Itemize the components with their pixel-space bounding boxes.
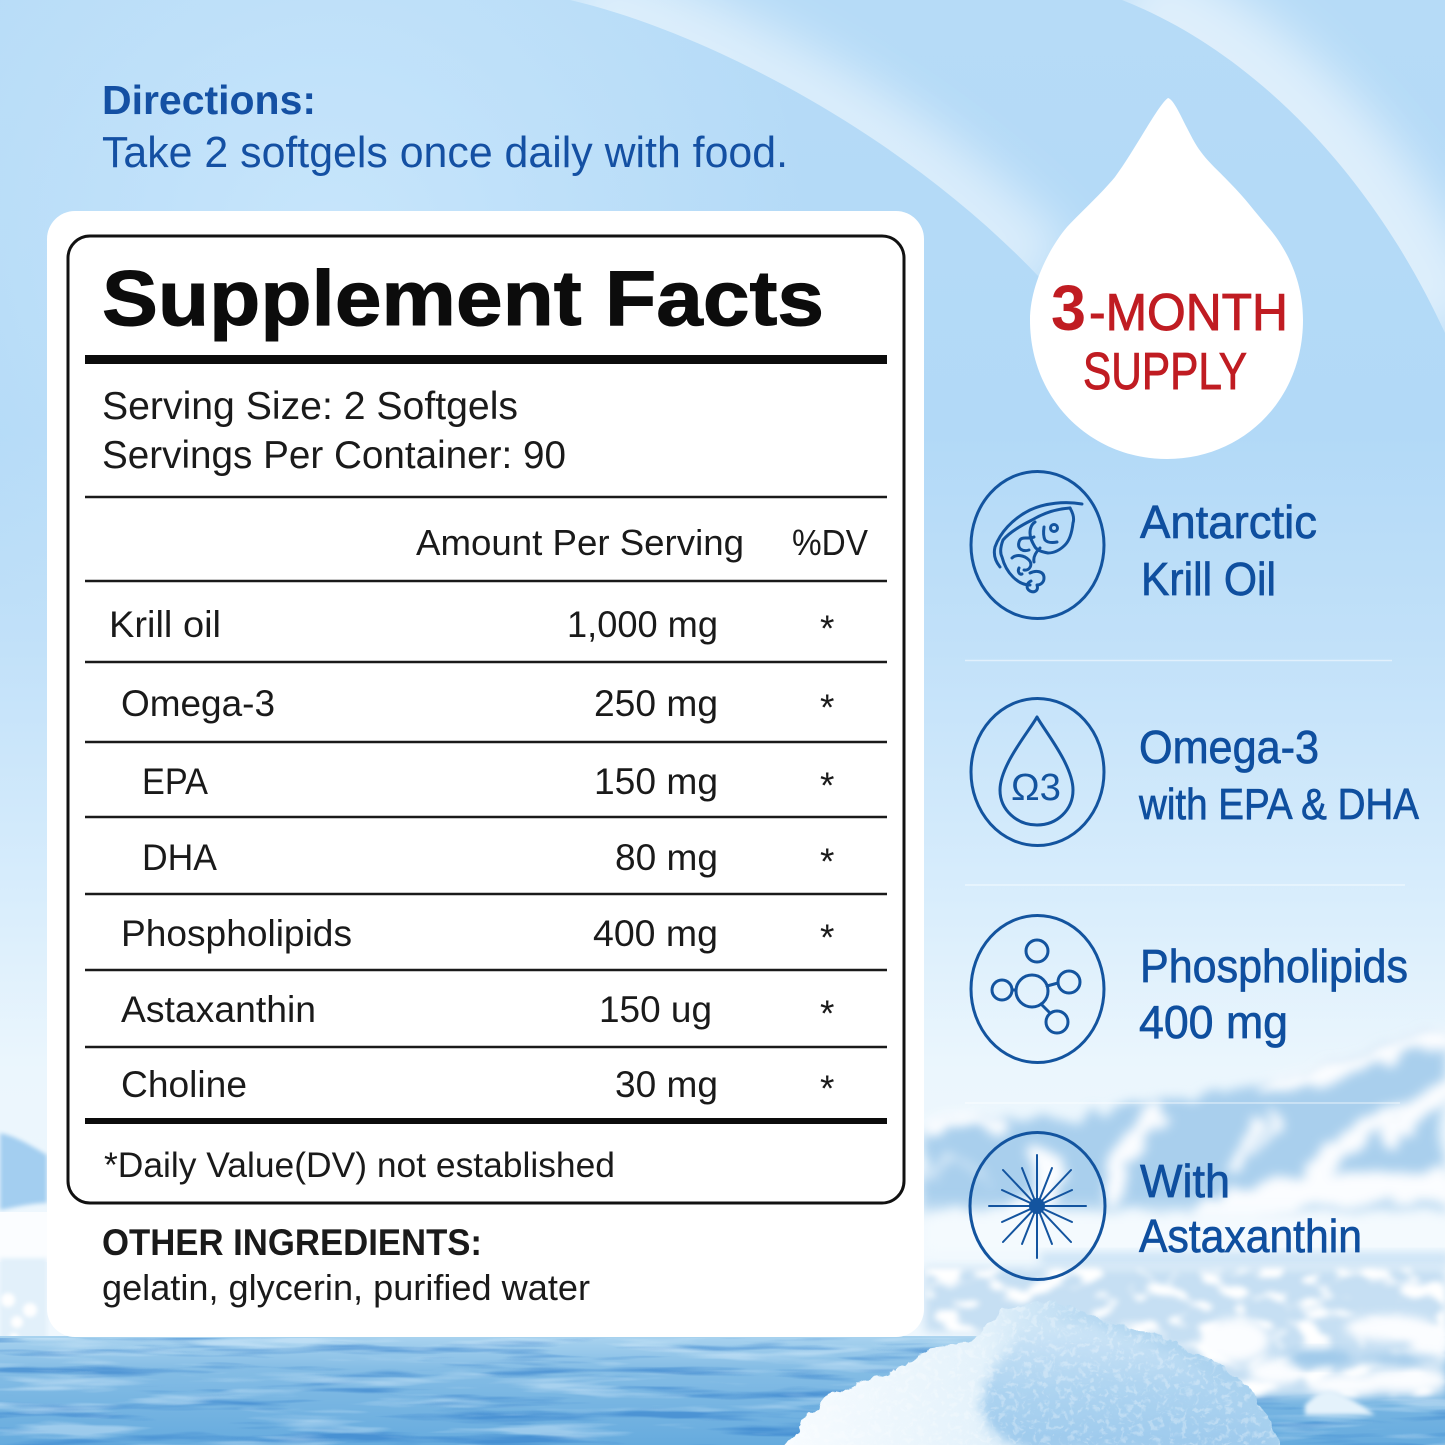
other ingredients — [102, 1222, 590, 1308]
feature: phospholipids: 400 mg — [1139, 996, 1288, 1048]
row: astaxanthin: * — [820, 993, 834, 1034]
row: choline — [121, 1064, 834, 1109]
row: omega-3: * — [820, 687, 834, 728]
row: dha: 80 mg — [615, 837, 718, 878]
feature: with astaxanthin: Astaxanthin — [1139, 1210, 1362, 1262]
badge: 3-month supply drop: 3 — [1051, 272, 1086, 344]
title: supplement facts: Supplement Facts — [102, 254, 824, 342]
row: omega-3: 250 mg — [594, 683, 718, 724]
row: astaxanthin: Astaxanthin — [121, 989, 316, 1030]
badge: 3-month supply drop: -MONTH — [1089, 284, 1288, 342]
row: krill oil: * — [820, 608, 834, 649]
icon: omega-3 drop: Ω3 — [1011, 767, 1061, 809]
feature: phospholipids: Phospholipids — [1140, 940, 1408, 992]
row: omega-3 — [85, 683, 887, 742]
row: krill oil: Krill oil — [109, 604, 221, 645]
panel: supplement facts card — [47, 211, 924, 1337]
heading: directions: Take 2 softgels once daily with food. — [102, 128, 788, 177]
row: phospholipids: 400 mg — [593, 913, 718, 954]
row: phospholipids: * — [820, 917, 834, 958]
row: dha: DHA — [142, 837, 217, 878]
feature: phospholipids — [971, 916, 1408, 1062]
iceberg — [780, 1300, 1285, 1445]
other ingredients: OTHER INGREDIENTS: — [102, 1222, 482, 1263]
badge: 3-month supply drop: SUPPLY — [1083, 343, 1247, 401]
heading: directions: Directions: — [102, 77, 316, 123]
icon: omega-3 drop — [971, 698, 1104, 846]
feature: with astaxanthin — [970, 1132, 1362, 1280]
divider lines — [965, 660, 1405, 1103]
row: krill oil — [85, 604, 887, 662]
sea — [0, 1336, 1445, 1445]
distant snow field — [925, 1268, 1445, 1396]
icon: krill — [971, 472, 1104, 618]
row: astaxanthin — [85, 989, 887, 1047]
left mountain — [0, 1133, 47, 1210]
other ingredients: gelatin, glycerin, purified water — [102, 1267, 590, 1308]
feature: antarctic krill oil: Antarctic — [1140, 496, 1317, 548]
row: epa: EPA — [142, 761, 208, 802]
badge: 3-month supply drop — [1030, 98, 1303, 459]
heading: directions — [102, 77, 788, 177]
row: choline: * — [820, 1068, 834, 1109]
feature: omega-3 with EPA and DHA — [971, 698, 1420, 846]
row: dha — [85, 837, 887, 894]
table header: Amount Per Serving — [416, 522, 744, 563]
feature: with astaxanthin: With — [1140, 1155, 1230, 1207]
row: epa: 150 mg — [594, 761, 718, 802]
row: astaxanthin: 150 ug — [599, 989, 712, 1030]
row: epa — [85, 761, 887, 817]
row: dha: * — [820, 841, 834, 882]
icon: starburst — [970, 1132, 1105, 1280]
row: krill oil: 1,000 mg — [567, 604, 718, 645]
row: choline: 30 mg — [615, 1064, 718, 1105]
row: omega-3: Omega-3 — [121, 683, 275, 724]
icon: molecule — [971, 916, 1104, 1062]
feature: antarctic krill oil — [971, 472, 1317, 618]
table header: %DV — [792, 522, 868, 563]
row: phospholipids: Phospholipids — [121, 913, 352, 954]
table header — [85, 497, 887, 581]
supplement facts box outline — [68, 236, 904, 1203]
feature: omega-3 with EPA and DHA: Omega-3 — [1139, 721, 1319, 773]
row: phospholipids — [85, 913, 887, 970]
serving information — [102, 385, 566, 477]
footnote: *Daily Value(DV) not established — [104, 1146, 615, 1185]
row: epa: * — [820, 765, 834, 806]
feature: antarctic krill oil: Krill Oil — [1141, 553, 1276, 605]
serving information: Servings Per Container: 90 — [102, 434, 566, 477]
row: choline: Choline — [121, 1064, 247, 1105]
serving information: Serving Size: 2 Softgels — [102, 385, 518, 428]
